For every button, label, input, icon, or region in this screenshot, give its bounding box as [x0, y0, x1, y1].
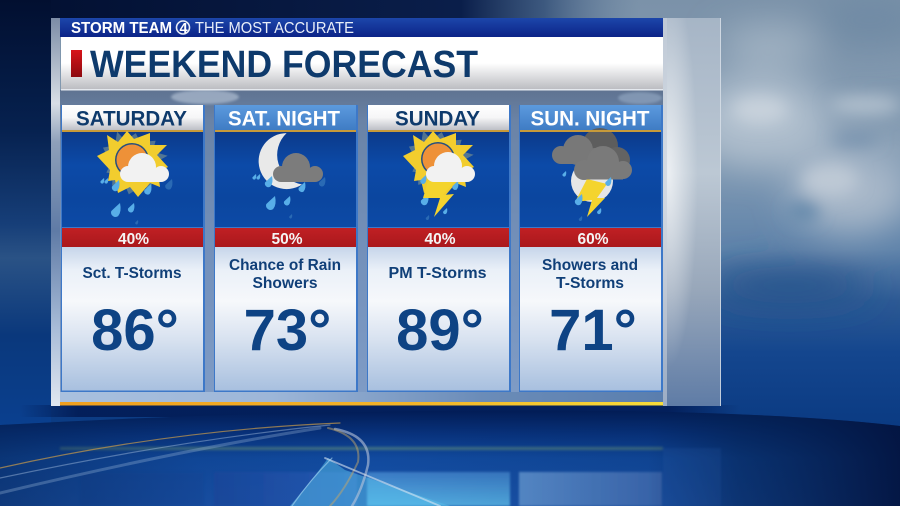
day heading: SUNDAY: [395, 108, 480, 130]
title: WEEKEND FORECAST: [90, 44, 478, 86]
condition text: Showers: [252, 275, 318, 292]
day heading: [368, 105, 509, 130]
graphic backing panel: [51, 18, 663, 406]
icon: sun, cloud and rain: [93, 126, 172, 224]
panel: Saturday: [61, 105, 205, 392]
day heading: SATURDAY: [76, 108, 187, 130]
glass side panel: [663, 18, 721, 406]
condition text: Sct. T-Storms: [82, 265, 182, 282]
panel: Sunday night: [519, 105, 663, 392]
gold base line: [60, 402, 663, 406]
title accent: [71, 50, 82, 77]
precipitation chance: [62, 228, 203, 248]
top bar: station branding: THE MOST ACCURATE: [195, 20, 354, 37]
temperature: 71°: [549, 298, 637, 363]
day heading: SAT. NIGHT: [228, 108, 340, 130]
day heading: SUN. NIGHT: [530, 108, 650, 130]
temperature: 73°: [244, 298, 331, 363]
condition text: T-Storms: [556, 275, 624, 292]
icon: channel 4 logo: 4: [179, 21, 188, 37]
condition text: [229, 257, 341, 292]
condition text: [542, 257, 638, 292]
icon: clouds, moon and lightning: [552, 128, 632, 221]
top bar: station branding: STORM TEAM: [71, 20, 172, 37]
background: reflective studio floor: [0, 405, 900, 506]
precipitation chance: 40%: [424, 231, 456, 248]
condition text: PM T-Storms: [388, 265, 486, 282]
precipitation chance: [215, 228, 356, 248]
condition text: Showers and: [542, 257, 638, 274]
icon: moon, cloud and rain: [252, 133, 325, 218]
precipitation chance: 60%: [577, 231, 609, 248]
icon: channel 4 logo: [176, 21, 190, 37]
condition text: Chance of Rain: [229, 257, 341, 274]
title band: [61, 37, 663, 90]
icon: sun, cloud and lightning: [399, 125, 478, 220]
panel: Saturday night: [214, 105, 358, 392]
precipitation chance: [368, 228, 509, 248]
precipitation chance: 40%: [118, 231, 149, 248]
precipitation chance: 50%: [271, 231, 303, 248]
precipitation chance: [520, 228, 661, 248]
top bar: station branding: [60, 18, 663, 37]
temperature: 86°: [91, 298, 179, 363]
temperature: 89°: [396, 298, 484, 363]
panel: Sunday: [367, 105, 511, 392]
